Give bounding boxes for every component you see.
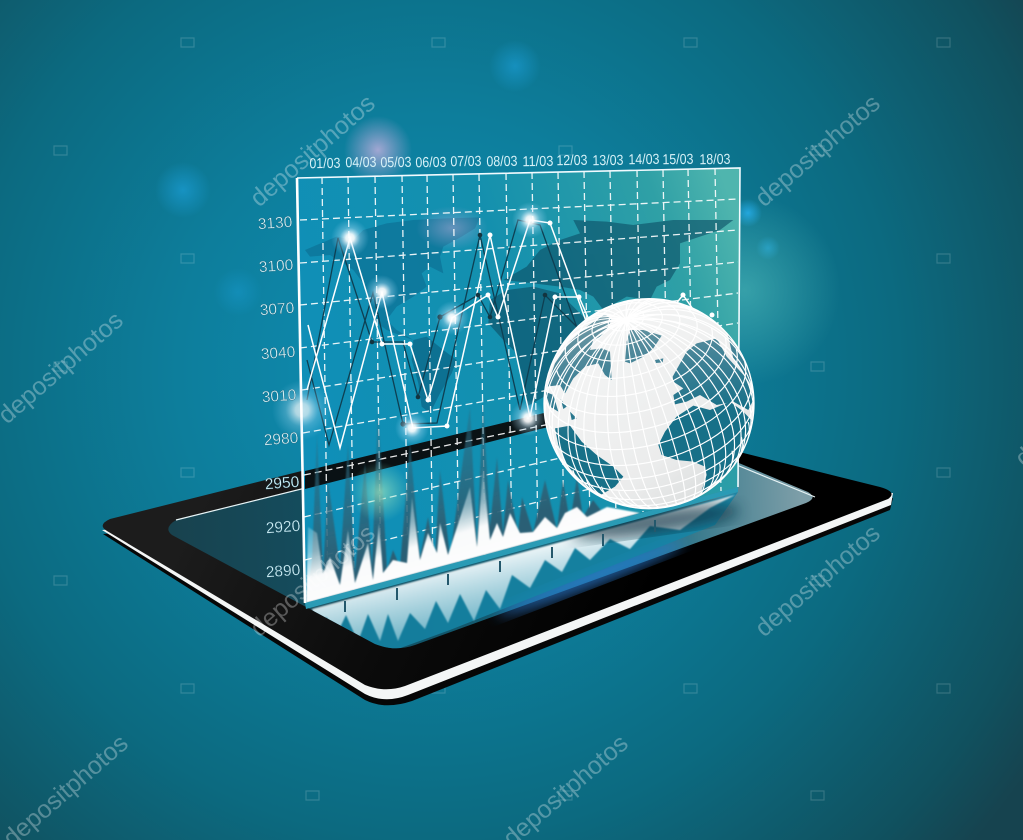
tablet underside [103,498,893,705]
area chart dark spikes [306,400,640,603]
date labels: 05/03 [380,155,412,171]
panel left edge [297,178,305,603]
y-axis labels: 2950 [264,474,300,493]
chart glow points [272,202,548,522]
depositphotos watermarks: depositphotos [750,519,886,642]
y-axis labels: 3100 [258,257,294,276]
reflected shadow of globe [569,498,741,546]
globe grid [545,300,754,508]
screen top highlight [176,425,815,520]
date labels: 15/03 [662,152,694,168]
y-axis labels: 3130 [257,214,293,233]
panel border [297,168,740,487]
area chart white spikes [306,467,640,603]
camera watermark icons [54,38,950,800]
panel fill [297,168,740,603]
chart reflection on the screen [308,492,741,650]
date labels [309,152,731,172]
tablet white edge [102,493,893,699]
globe rim [544,299,754,509]
globe continents [545,314,755,496]
panel base band [305,487,738,609]
black tablet edge seen through panel [305,412,548,489]
blue light streak on tablet [493,534,687,622]
lavender map glow [416,206,488,250]
line chart dark series [307,220,585,445]
y-axis labels: 3040 [260,344,296,363]
y-axis labels: 2920 [265,518,301,537]
date labels: 08/03 [486,154,518,170]
tablet screen [168,425,813,648]
y-axis labels: 3070 [259,300,295,319]
line chart markers [380,220,714,428]
y-axis labels [257,214,301,581]
tablet black face [103,408,892,689]
date labels: 14/03 [628,152,660,168]
reflected peaks [312,495,735,642]
line chart white series [307,220,695,448]
y-axis labels: 3010 [261,387,297,406]
grid [300,168,738,597]
date labels: 11/03 [522,154,554,170]
y-axis labels: 2980 [263,430,299,449]
date labels: 04/03 [345,155,377,171]
date labels: 18/03 [699,152,731,168]
depositphotos watermarks: depositphotos [750,89,886,212]
date labels: 07/03 [450,154,482,170]
y-axis labels: 2890 [265,562,301,581]
depositphotos watermarks: depositphotos [245,89,381,212]
date labels: 13/03 [592,153,624,169]
date labels: 01/03 [309,156,341,172]
background light glows [155,40,840,385]
globe [543,298,755,510]
tablet [102,408,893,705]
globe sphere [544,299,754,509]
date labels: 12/03 [556,153,588,169]
chart panel [272,168,740,609]
depositphotos watermarks: depositphotos [245,519,381,642]
date labels: 06/03 [415,155,447,171]
world map [305,217,733,413]
